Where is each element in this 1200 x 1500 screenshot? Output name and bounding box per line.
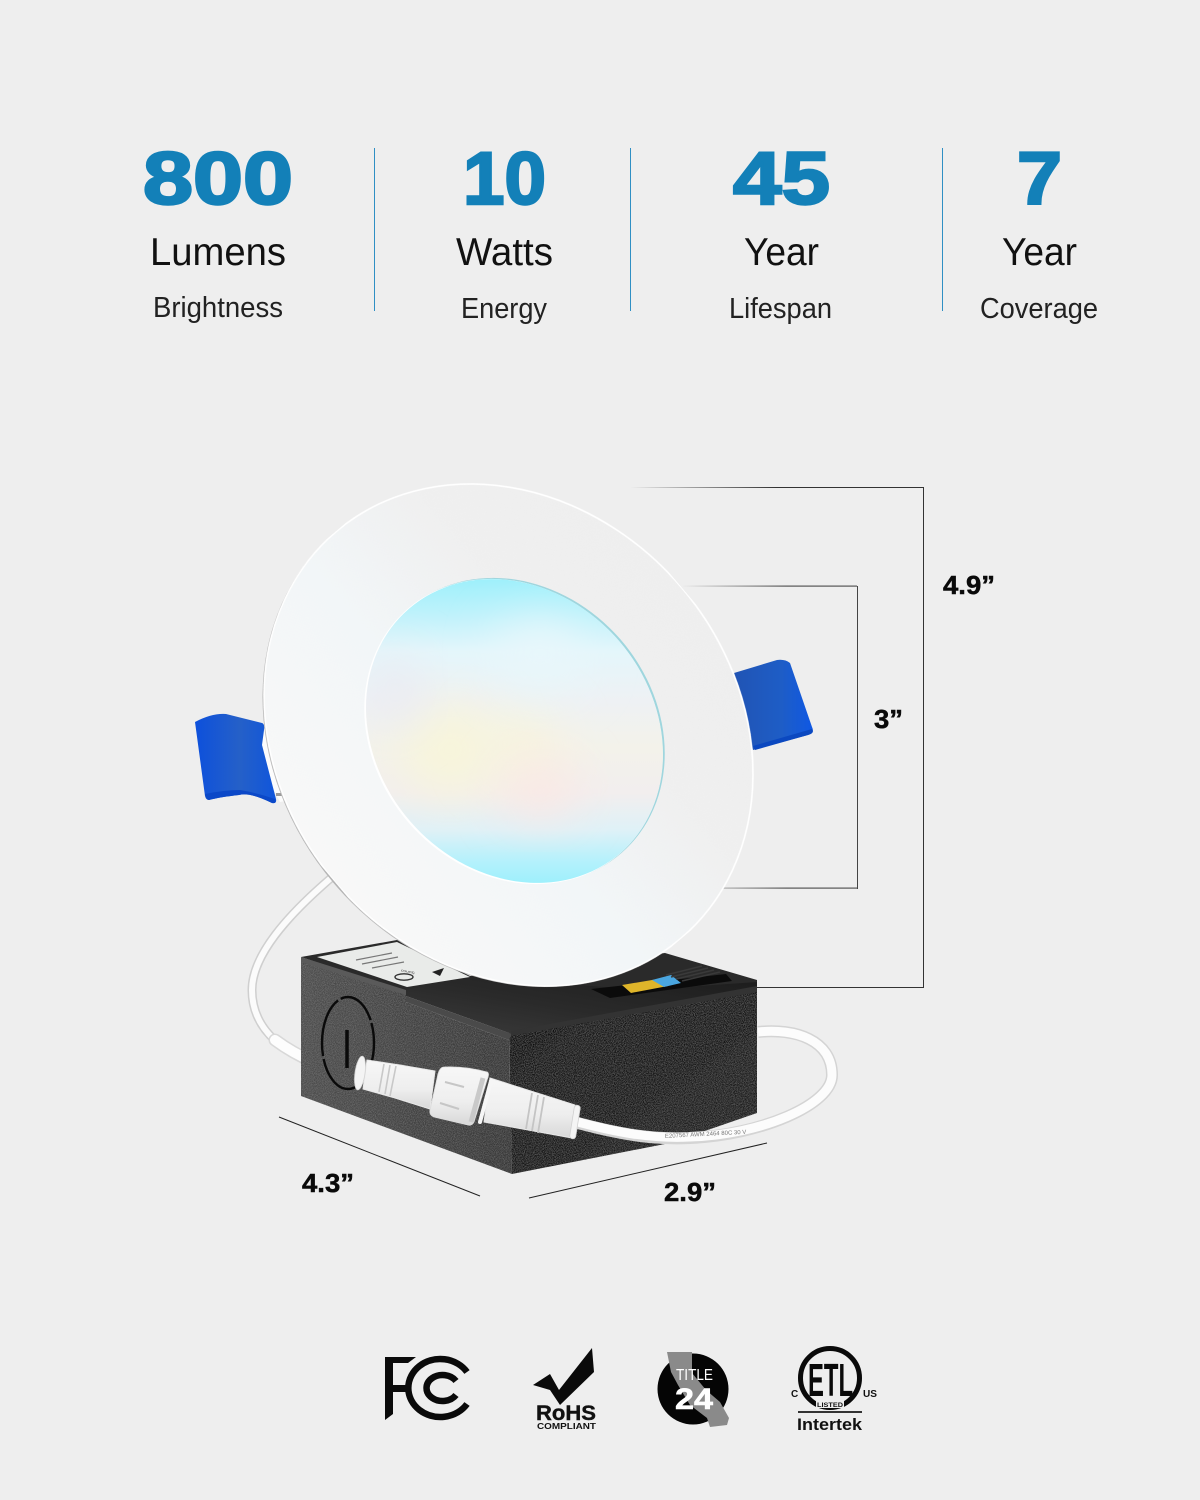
icon: Title 24 California: 24	[675, 1383, 713, 1416]
connector nut	[430, 1067, 488, 1125]
wire: right lead	[574, 1031, 832, 1138]
wire print: E207567 AWM 2464 80C 30 V	[665, 1130, 746, 1140]
stat: 7 Year Coverage: Coverage	[980, 293, 1098, 325]
infographic canvas	[144, 148, 1097, 1430]
mounting hook: left	[262, 728, 292, 802]
stat: 800 Lumens Brightness: Brightness	[153, 292, 283, 324]
box top	[301, 940, 757, 1034]
box right face	[509, 990, 757, 1174]
icon: ETL listed Intertek: LISTED	[817, 1402, 843, 1409]
stat: 800 Lumens Brightness	[143, 137, 293, 324]
downlight trim disc	[262, 483, 754, 988]
icon: Title 24 California	[658, 1352, 729, 1427]
icon: FCC logo	[385, 1357, 467, 1420]
lens	[364, 578, 665, 884]
icon: ETL listed Intertek: C	[791, 1389, 798, 1400]
terminal with colored connector	[591, 966, 732, 998]
stat: 7 Year Coverage	[980, 137, 1098, 325]
connector end flange	[569, 1105, 581, 1139]
dimension: 4.3 inch line	[279, 1117, 480, 1196]
stat: 7 Year Coverage: Year	[1002, 231, 1077, 274]
icon: ETL listed Intertek: Intertek	[797, 1415, 863, 1434]
waterproof connector	[353, 1055, 581, 1139]
icon: ETL listed Intertek	[791, 1348, 877, 1434]
icon: RoHS compliant: RoHS	[536, 1402, 596, 1425]
stat: 800 Lumens Brightness: 800	[143, 137, 293, 220]
stat: 45 Year Lifespan: Year	[744, 231, 819, 274]
stat: 800 Lumens Brightness: Lumens	[150, 231, 286, 274]
mounting clip: right	[734, 660, 813, 750]
stat: 45 Year Lifespan: Lifespan	[729, 293, 832, 325]
wire: upper left lead	[252, 878, 358, 1076]
label: 4.9: 4.9”	[943, 570, 995, 600]
label: 2.9: 2.9”	[664, 1177, 716, 1207]
icon: Title 24 California: TITLE	[676, 1367, 713, 1384]
knockout circle	[322, 997, 374, 1089]
stat: 7 Year Coverage: 7	[1017, 137, 1062, 220]
stat: 10 Watts Energy	[456, 137, 553, 325]
connector flange	[353, 1055, 367, 1091]
junction box	[301, 940, 757, 1174]
connector rear body	[363, 1060, 435, 1109]
icon: RoHS compliant: COMPLIANT	[537, 1421, 597, 1431]
dimension: 4.9 inch bracket	[630, 487, 924, 988]
icon: ETL listed Intertek: US	[863, 1389, 877, 1400]
label: 4.3: 4.3”	[302, 1168, 354, 1198]
dimension: 3 inch bracket	[682, 586, 858, 889]
label sticker: Sunco	[400, 969, 415, 975]
stat: 10 Watts Energy: Watts	[456, 231, 553, 274]
dimension: 2.9 inch line	[529, 1143, 767, 1198]
icon: RoHS compliant	[533, 1348, 597, 1431]
stat: 10 Watts Energy: Energy	[461, 293, 547, 325]
label: 3: 3”	[874, 704, 903, 734]
stat: 45 Year Lifespan	[729, 137, 832, 325]
stat: 10 Watts Energy: 10	[463, 137, 546, 220]
label sticker	[317, 942, 470, 987]
box left face	[301, 958, 512, 1174]
connector front body	[484, 1078, 575, 1138]
stat: 45 Year Lifespan: 45	[733, 137, 830, 220]
mounting clip: left	[195, 714, 276, 803]
icon: ETL listed Intertek: ETL	[808, 1354, 853, 1406]
